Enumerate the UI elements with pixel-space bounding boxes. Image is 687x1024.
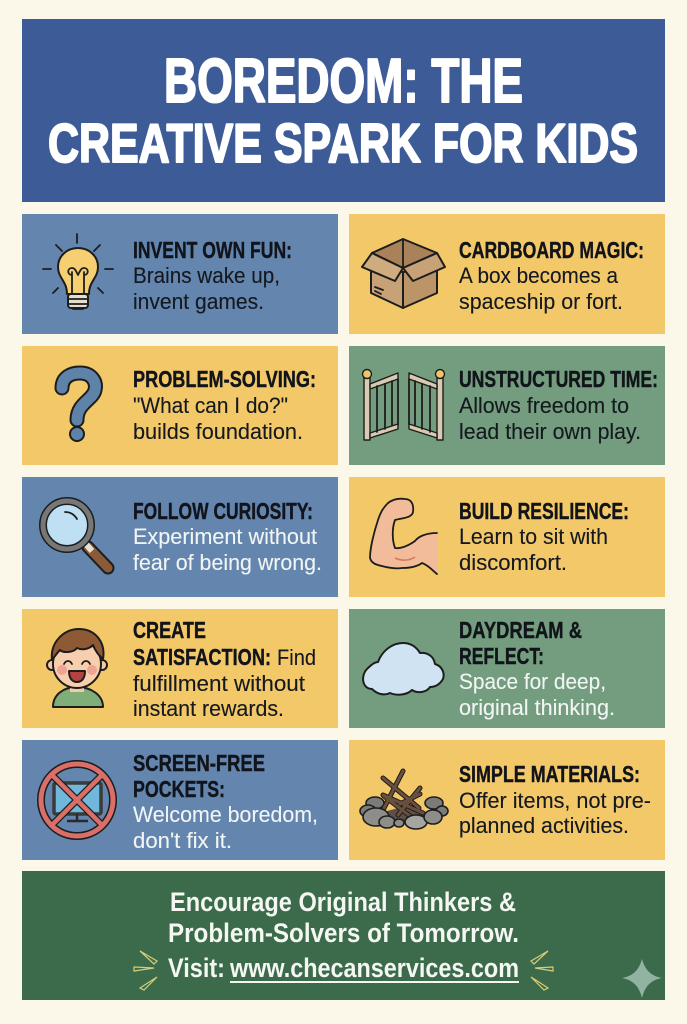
call to action text: www.checanservices.com xyxy=(229,953,519,983)
text: POCKETS: xyxy=(133,776,225,802)
text: fulfillment without xyxy=(133,671,306,696)
panel: create satisfaction xyxy=(22,609,338,728)
icon: magnifying glass xyxy=(43,501,108,568)
icon: open gate xyxy=(362,370,444,440)
icon: cloud xyxy=(363,643,444,695)
text: planned activities. xyxy=(459,813,629,838)
panel: follow curiosity xyxy=(22,477,338,597)
panel: simple materials xyxy=(349,740,665,860)
panel: problem-solving xyxy=(22,346,338,465)
text xyxy=(459,366,658,444)
text xyxy=(133,237,292,314)
text: discomfort. xyxy=(459,550,567,575)
icon: flexed arm xyxy=(370,499,437,574)
icon: sticks and stones xyxy=(360,771,448,829)
text xyxy=(133,366,316,444)
title: BOREDOM: THE xyxy=(164,47,523,116)
panel: build resilience xyxy=(349,477,665,597)
footer banner xyxy=(22,871,665,1000)
icon: sparkle xyxy=(622,959,662,998)
text: INVENT OWN FUN: xyxy=(133,237,292,263)
text: fear of being wrong. xyxy=(133,550,322,575)
text: FOLLOW CURIOSITY: xyxy=(133,498,313,524)
text xyxy=(133,617,316,721)
text xyxy=(459,617,615,720)
text: invent games. xyxy=(133,289,264,314)
text: A box becomes a xyxy=(459,263,618,288)
icon: left sparks xyxy=(134,951,157,990)
text: builds foundation. xyxy=(133,419,303,444)
call to action text: Visit: xyxy=(168,953,225,983)
text: Brains wake up, xyxy=(133,263,280,288)
text: Allows freedom to xyxy=(459,393,629,418)
title xyxy=(48,47,638,174)
panel: daydream and reflect xyxy=(349,609,665,728)
text: Learn to sit with xyxy=(459,524,608,549)
text: Offer items, not pre- xyxy=(459,788,651,813)
text: SCREEN-FREE xyxy=(133,750,265,776)
text: SIMPLE MATERIALS: xyxy=(459,761,640,787)
icon: light bulb xyxy=(43,234,113,309)
text: spaceship or fort. xyxy=(459,289,623,314)
text: CREATE xyxy=(133,617,206,643)
text: Welcome boredom, xyxy=(133,802,318,827)
text: Space for deep, xyxy=(459,669,606,694)
icon: question mark xyxy=(62,373,95,441)
icon: smiling child xyxy=(47,629,107,707)
text xyxy=(459,761,651,838)
icon: right sparks xyxy=(531,951,553,990)
text: Experiment without xyxy=(133,524,318,549)
text: SATISFACTION: xyxy=(133,644,271,670)
call to action text: Problem-Solvers of Tomorrow. xyxy=(168,918,519,948)
header banner xyxy=(22,19,665,202)
icon: cardboard box xyxy=(362,239,445,308)
text xyxy=(459,237,644,314)
text xyxy=(133,750,318,853)
text: original thinking. xyxy=(459,695,615,720)
text: instant rewards. xyxy=(133,696,284,721)
call to action text xyxy=(168,887,519,983)
text: BUILD RESILIENCE: xyxy=(459,498,629,524)
text xyxy=(133,498,322,575)
icon: no screens xyxy=(41,764,113,836)
text: lead their own play. xyxy=(459,419,641,444)
text: DAYDREAM & xyxy=(459,617,582,643)
text: REFLECT: xyxy=(459,643,544,669)
text: Find xyxy=(277,645,316,670)
text: PROBLEM-SOLVING: xyxy=(133,366,316,392)
text: "What can I do?" xyxy=(133,393,288,418)
call to action text: Encourage Original Thinkers & xyxy=(170,887,516,917)
panel: invent own fun xyxy=(22,214,338,334)
panel: screen-free pockets xyxy=(22,740,338,860)
text xyxy=(459,498,629,575)
panel: cardboard magic xyxy=(349,214,665,334)
panel: unstructured time xyxy=(349,346,665,465)
text: don't fix it. xyxy=(133,828,232,853)
